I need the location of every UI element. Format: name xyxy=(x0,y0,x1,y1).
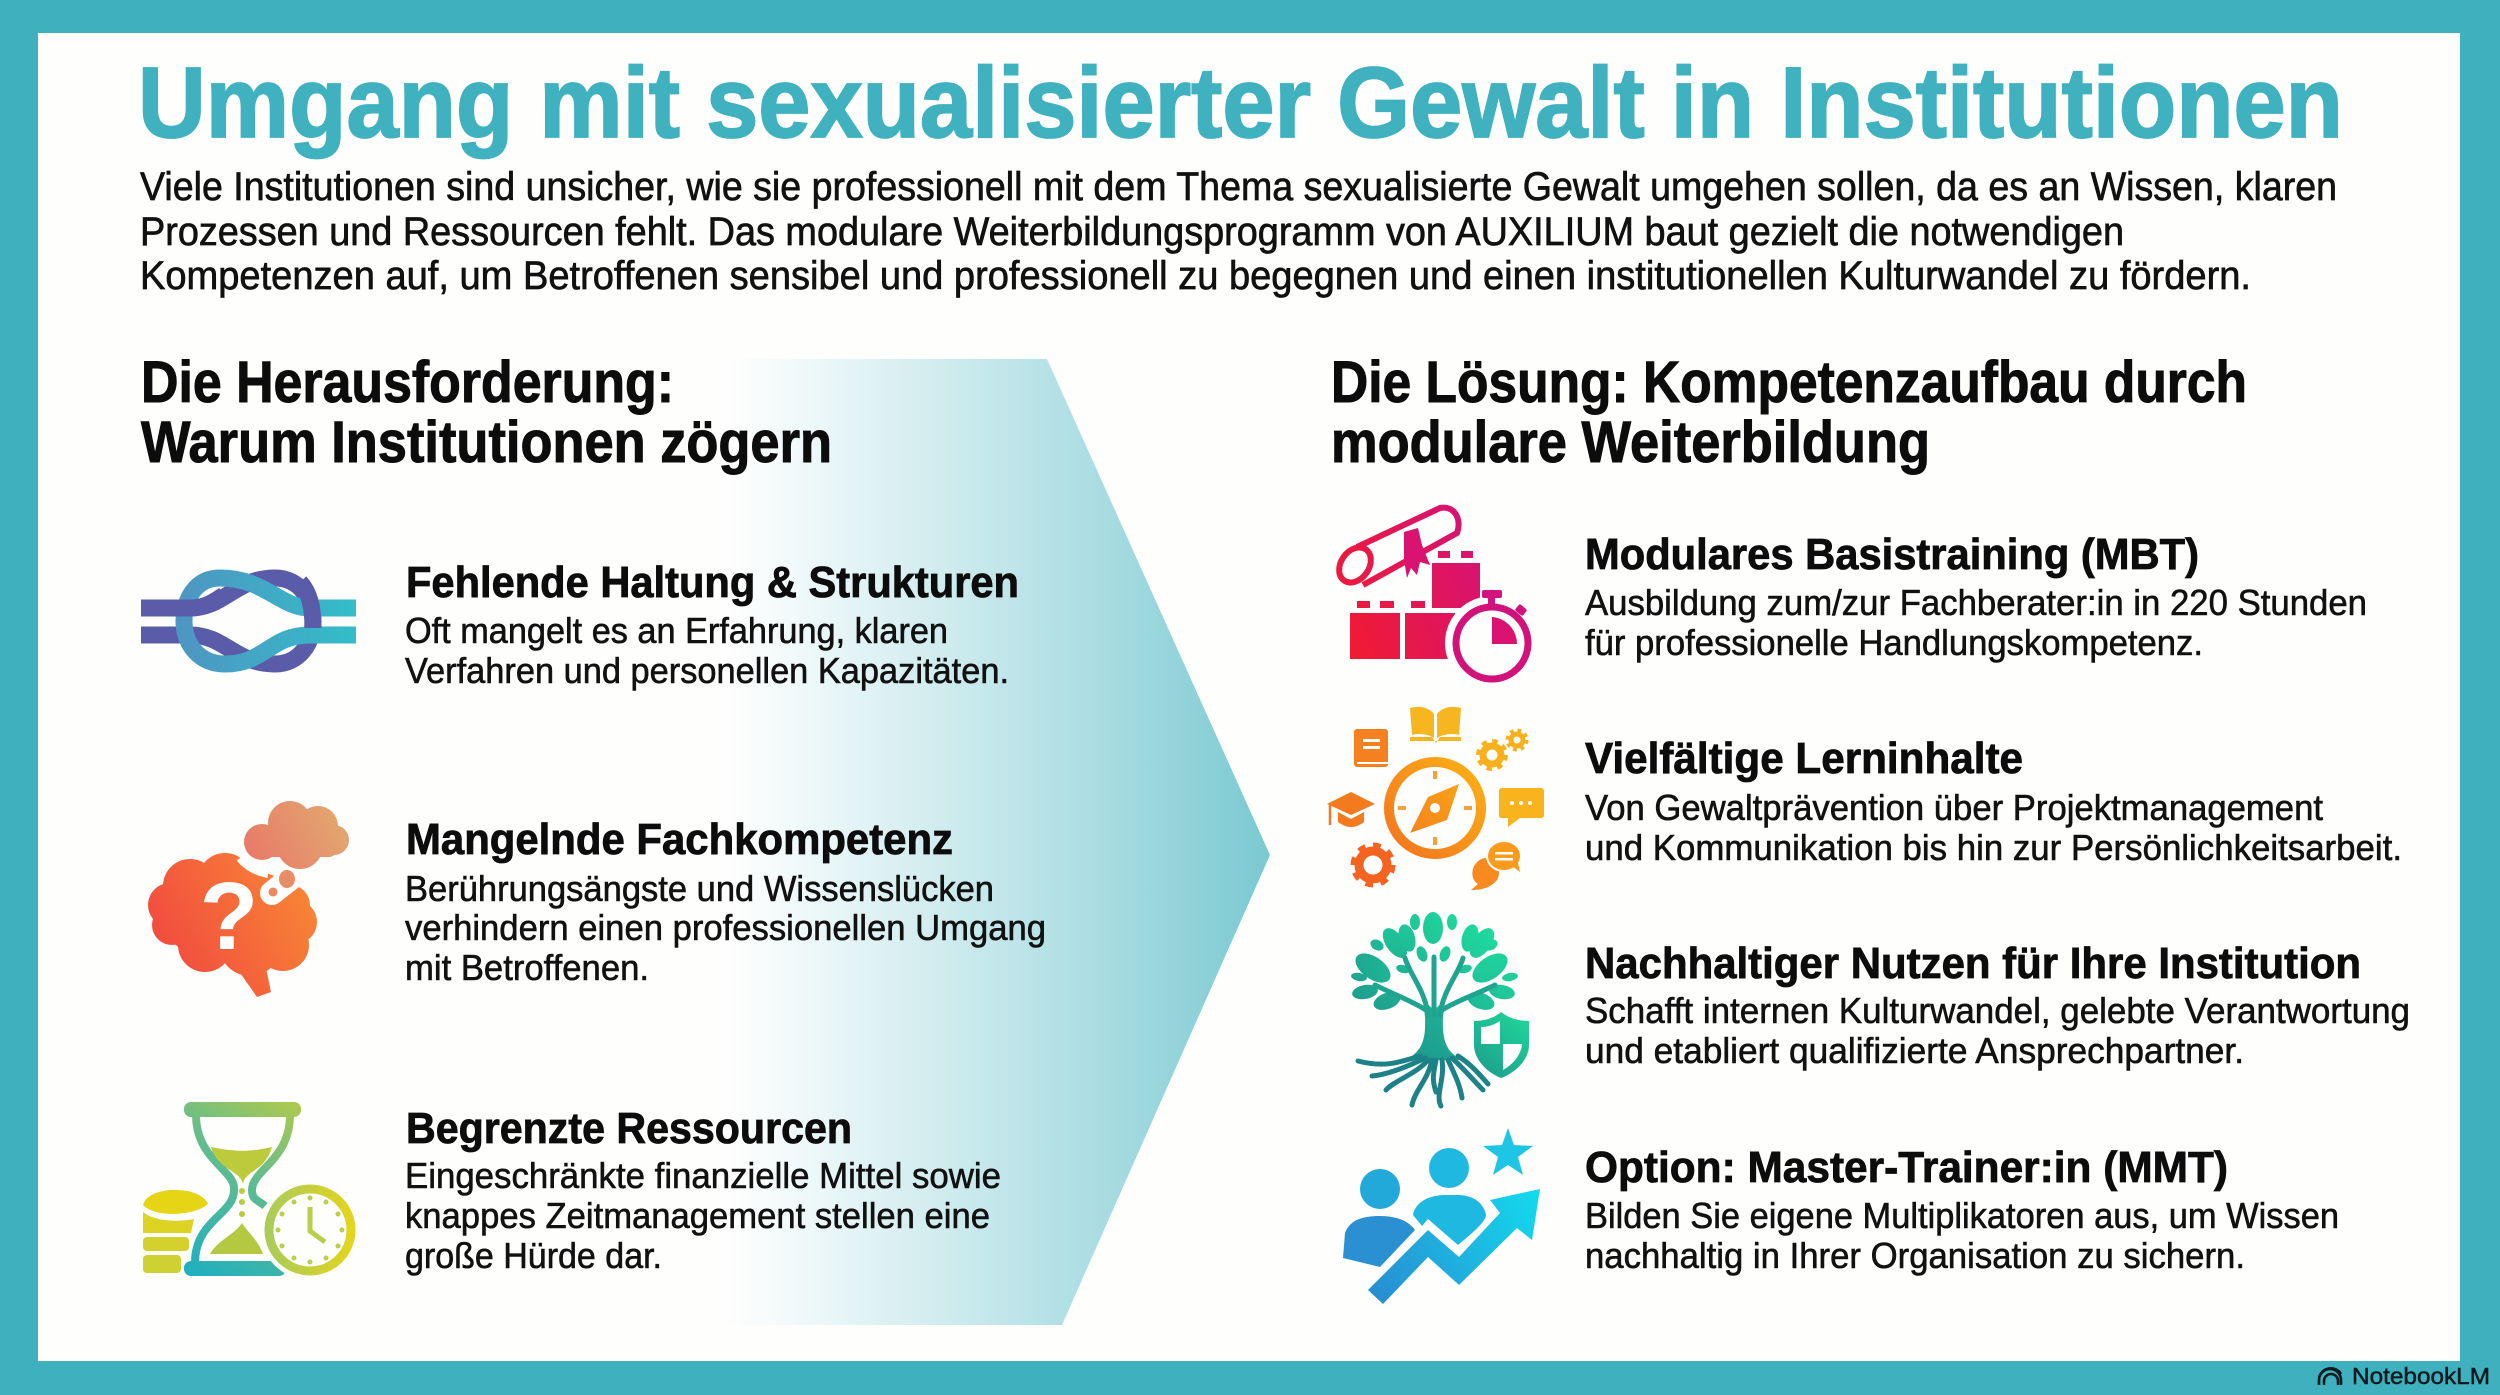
challenge item 2 text: mit Betroffenen. xyxy=(405,947,649,988)
challenge item 3 text xyxy=(405,1104,1001,1276)
heading: die Lösung xyxy=(1331,350,2247,475)
challenge item 2 text: Mangelnde Fachkompetenz xyxy=(406,815,953,864)
solution item 4 text: nachhaltig in Ihrer Organisation zu sichern. xyxy=(1585,1235,2245,1276)
challenge item 1 text xyxy=(405,558,1019,691)
solution item 3 text: und etabliert qualifizierte Ansprechpartner. xyxy=(1585,1030,2244,1071)
chevron arrow background xyxy=(720,359,1270,1325)
solution item 2 text: Vielfältige Lerninhalte xyxy=(1585,734,2023,783)
icon: tree with shield xyxy=(1350,912,1529,1106)
heading: die Lösung: modulare Weiterbildung xyxy=(1331,410,1930,475)
solution item 4 text xyxy=(1585,1143,2339,1276)
icon: compass with learning symbols xyxy=(1327,707,1544,890)
heading: die Herausforderung: Warum Institutionen zögern xyxy=(141,410,832,475)
NotebookLM logo: NotebookLM xyxy=(2352,1363,2490,1389)
solution item 3 text: Nachhaltiger Nutzen für Ihre Institution xyxy=(1585,939,2361,988)
icon: people with star and rising arrow xyxy=(1343,1128,1540,1304)
challenge item 1 text: Oft mangelt es an Erfahrung, klaren xyxy=(405,610,948,651)
solution item 3 text xyxy=(1585,939,2410,1071)
challenge item 2 text: verhindern einen professionellen Umgang xyxy=(405,907,1046,948)
challenge item 1 text: Fehlende Haltung & Strukturen xyxy=(406,558,1019,607)
challenge item 3 text: Eingeschränkte finanzielle Mittel sowie xyxy=(405,1155,1001,1196)
challenge item 3 text: große Hürde dar. xyxy=(405,1235,662,1276)
icon: brain with question mark: ? xyxy=(200,863,258,970)
challenge item 2 text xyxy=(405,815,1046,988)
solution item 4 text: Option: Master-Trainer:in (MMT) xyxy=(1585,1143,2228,1192)
icon: hourglass with coins and clock xyxy=(143,1102,360,1280)
icon: diploma, blocks and stopwatch xyxy=(1333,508,1539,690)
challenge item 2 text: Berührungsängste und Wissenslücken xyxy=(405,868,994,909)
solution item 2 text: Von Gewaltprävention über Projektmanagement xyxy=(1585,787,2323,828)
intro text: Kompetenzen auf, um Betroffenen sensibel und professionell zu begegnen und einen institutionellen Kulturwandel zu fördern. xyxy=(140,254,2251,298)
intro text xyxy=(140,165,2337,298)
challenge item 1 text: Verfahren und personellen Kapazitäten. xyxy=(405,650,1009,691)
solution item 1 text: Ausbildung zum/zur Fachberater:in in 220 Stunden xyxy=(1585,582,2367,623)
solution item 3 text: Schafft internen Kulturwandel, gelebte Verantwortung xyxy=(1585,990,2410,1031)
icon: knot xyxy=(141,578,356,664)
solution item 2 text xyxy=(1585,734,2402,868)
title: Umgang mit sexualisierter Gewalt in Institutionen xyxy=(138,47,2343,159)
challenge item 3 text: knappes Zeitmanagement stellen eine xyxy=(405,1195,990,1236)
solution item 4 text: Bilden Sie eigene Multiplikatoren aus, um Wissen xyxy=(1585,1195,2339,1236)
intro text: Prozessen und Ressourcen fehlt. Das modulare Weiterbildungsprogramm von AUXILIUM baut gezielt die notwendigen xyxy=(140,210,2124,254)
intro text: Viele Institutionen sind unsicher, wie sie professionell mit dem Thema sexualisierte Gewalt umgehen sollen, da es an Wissen, klaren xyxy=(140,165,2337,209)
solution item 1 text: für professionelle Handlungskompetenz. xyxy=(1585,622,2203,663)
solution item 2 text: und Kommunikation bis hin zur Persönlichkeitsarbeit. xyxy=(1585,827,2402,868)
challenge item 3 text: Begrenzte Ressourcen xyxy=(406,1104,852,1153)
solution item 1 text xyxy=(1585,530,2367,663)
heading: die Lösung: Die Lösung: Kompetenzaufbau durch xyxy=(1331,350,2247,415)
heading: die Herausforderung xyxy=(141,350,832,475)
heading: die Herausforderung: Die Herausforderung: xyxy=(141,350,674,415)
icon: brain with question mark xyxy=(148,801,349,997)
solution item 1 text: Modulares Basistraining (MBT) xyxy=(1585,530,2199,579)
